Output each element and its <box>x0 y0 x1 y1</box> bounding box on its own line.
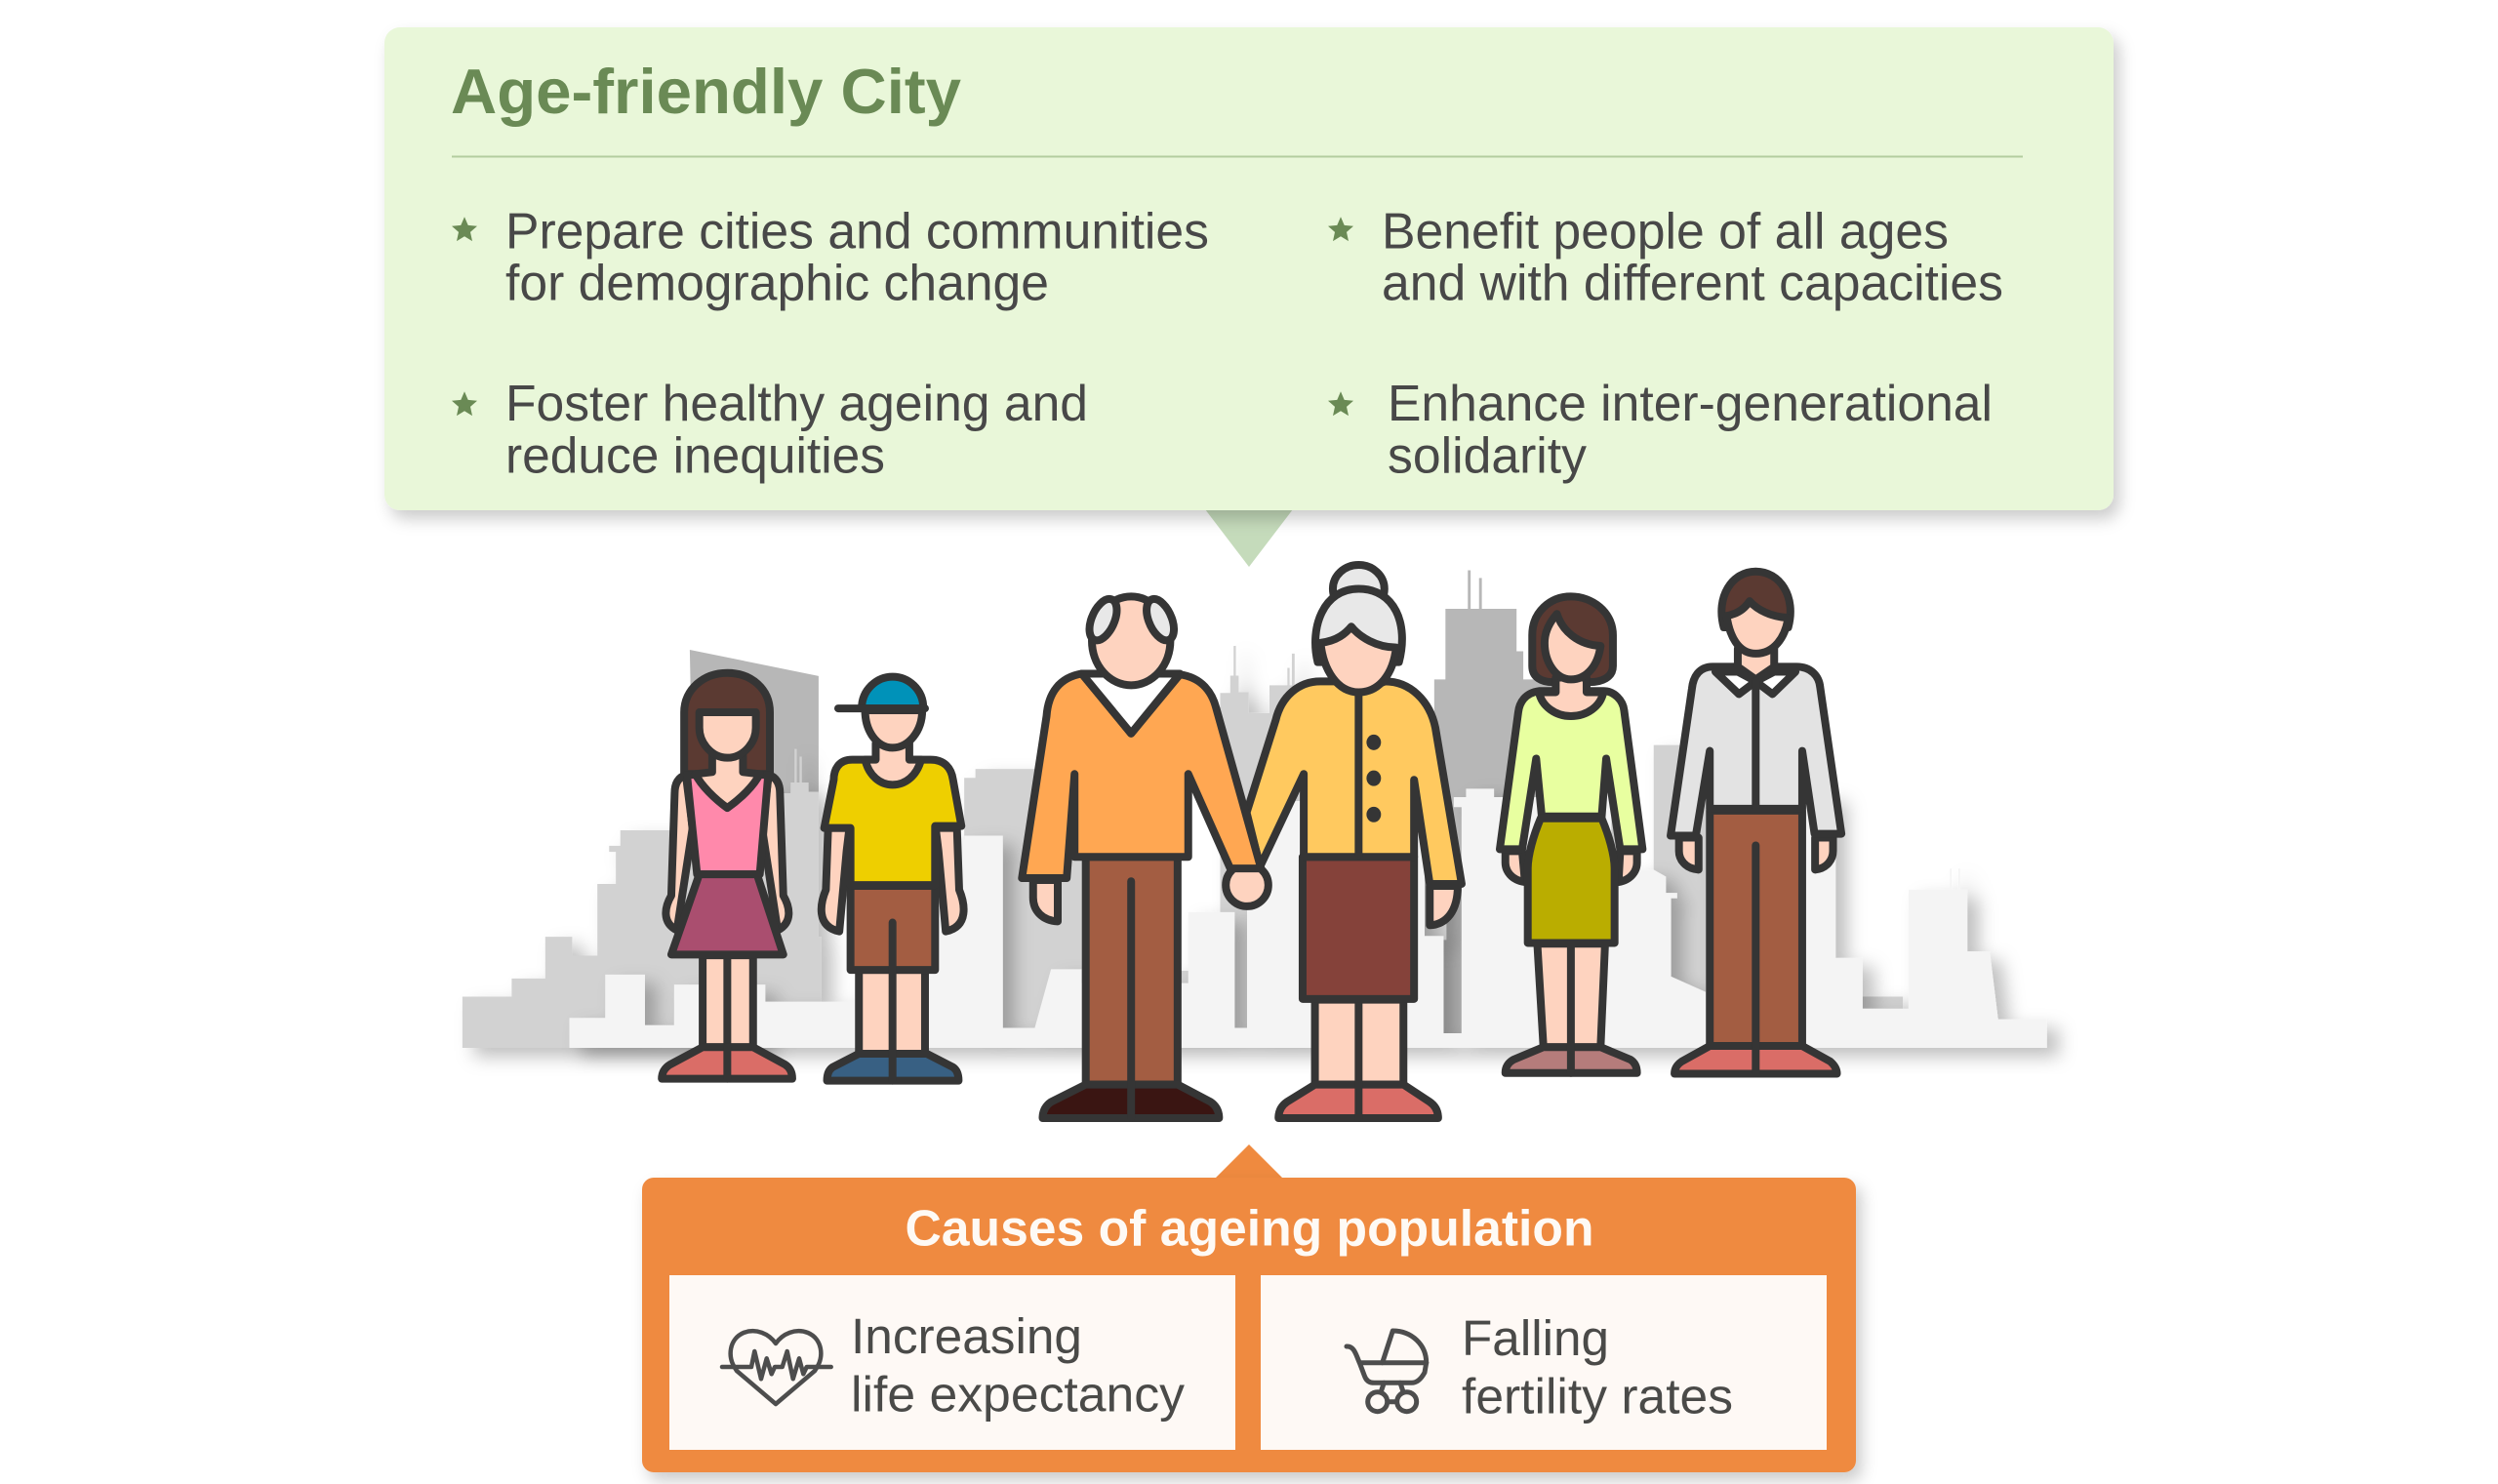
heading: Age-friendly City <box>451 56 961 127</box>
bullet: enhance solidarity: solidarity <box>1388 427 1587 484</box>
person: woman in green <box>1500 596 1642 1073</box>
panel background <box>384 27 2114 510</box>
panel: Age-friendly City <box>384 27 2114 567</box>
panel: Causes of ageing population <box>642 1144 1856 1472</box>
person: grandfather <box>1022 596 1269 1118</box>
card: life expectancy: life expectancy <box>851 1366 1185 1423</box>
bullet: benefit people: Benefit people of all ages <box>1382 203 1949 260</box>
person: boy <box>822 677 964 1081</box>
bullet: prepare cities: for demographic change <box>505 256 1049 312</box>
heading: Causes of ageing population <box>906 1200 1594 1257</box>
bullet: enhance solidarity: Enhance inter-generational <box>1388 376 1993 432</box>
bullet: enhance solidarity <box>1328 376 1993 484</box>
bullet: prepare cities <box>452 203 1209 312</box>
card: fertility rates <box>1261 1275 1827 1450</box>
person: grandmother <box>1247 565 1462 1118</box>
card: fertility rates: Falling <box>1462 1310 1609 1366</box>
city skyline background <box>463 571 2047 1048</box>
bullet: prepare cities: Prepare cities and communities <box>505 203 1209 260</box>
bullet: foster healthy ageing: reduce inequities <box>505 427 885 484</box>
person: man in shirt <box>1671 572 1841 1074</box>
panel background <box>642 1178 1856 1472</box>
icon: baby stroller <box>1347 1331 1427 1412</box>
bullet: foster healthy ageing: Foster healthy ageing and <box>505 376 1088 432</box>
callout pointer <box>1205 509 1293 567</box>
icon: heart with pulse <box>722 1331 831 1404</box>
bullet: benefit people <box>1328 203 2003 312</box>
person: girl <box>662 673 792 1079</box>
card: life expectancy: Increasing <box>851 1308 1082 1364</box>
card: life expectancy <box>669 1275 1235 1450</box>
people illustration <box>662 565 1841 1118</box>
card: fertility rates: fertility rates <box>1462 1368 1733 1424</box>
callout pointer <box>1215 1144 1283 1179</box>
bullet: benefit people: and with different capacities <box>1382 256 2003 312</box>
bullet: foster healthy ageing <box>452 376 1088 484</box>
